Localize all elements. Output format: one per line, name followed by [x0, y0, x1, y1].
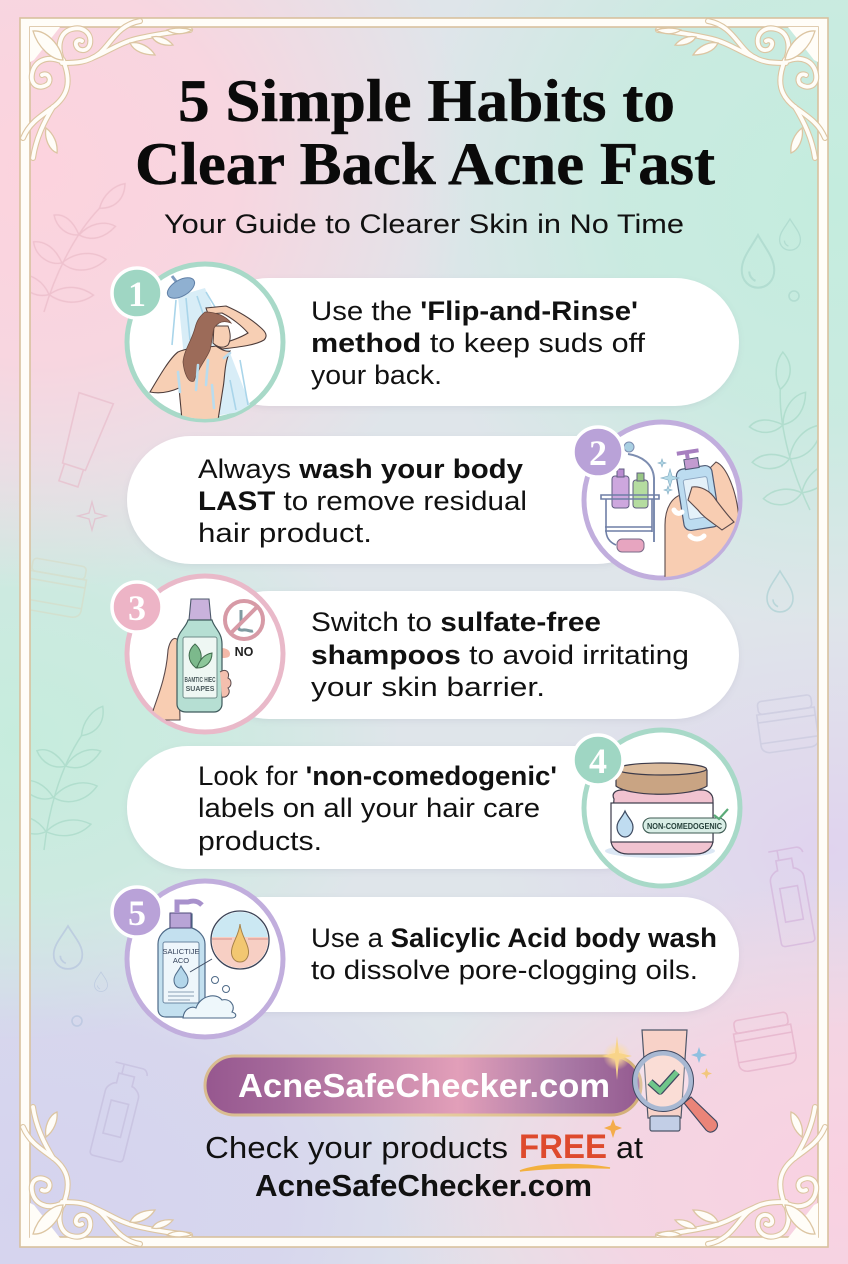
sparkle: [78, 502, 106, 530]
icon: no sulfates sign: [225, 601, 263, 659]
subtitle: Your Guide to Clearer Skin in No Time: [164, 209, 684, 239]
bottle outline right: [768, 846, 816, 948]
panel: habit 1: [112, 264, 739, 420]
text 4: products.: [198, 826, 322, 856]
text 1: method to keep suds off: [311, 328, 646, 358]
text 5: to dissolve pore-clogging oils.: [311, 955, 698, 985]
title: Clear Back Acne Fast: [135, 131, 715, 197]
jar outline bottom right: [731, 1011, 797, 1073]
icon: sulfate-free shampoo bottle: [127, 576, 283, 732]
drops bottom left: [54, 926, 108, 1026]
badge 5: [112, 887, 162, 937]
icon: non-comedogenic jar: [584, 730, 740, 886]
badge 4: [573, 735, 623, 785]
leaf sprig bottom left: [31, 706, 104, 850]
badge 4: 4: [589, 741, 607, 781]
text 1: [311, 296, 646, 390]
text 1: Use the 'Flip-and-Rinse': [311, 296, 638, 326]
icon: sulfate-free shampoo bottle: SUAPES: [186, 686, 215, 693]
panel: habit 4: [127, 730, 740, 886]
call to action button: [205, 1056, 641, 1115]
leaf sprig top left: [31, 183, 126, 312]
badge 3: [112, 582, 162, 632]
badge 5: 5: [128, 893, 146, 933]
text 1: your back.: [311, 360, 442, 390]
bottle outline bottom left: [89, 1061, 149, 1163]
icon: gold star near free: [604, 1119, 622, 1138]
leaf sprig right: [748, 351, 817, 510]
icon: shower head: [164, 274, 198, 302]
icon: woman showering: [127, 264, 283, 420]
call to action button: AcneSafeChecker.com: [238, 1067, 610, 1104]
text 2: [198, 454, 527, 548]
pill 2: [127, 436, 661, 564]
icon: magnifier over product tube: [632, 1030, 717, 1132]
icon: shower caddy and body wash: [584, 422, 740, 590]
badge 2: [573, 427, 623, 477]
text 4: Look for 'non-comedogenic': [198, 761, 557, 791]
icon: non-comedogenic jar: NON-COMEDOGENIC: [647, 821, 722, 831]
footer text: AcneSafeChecker.com: [255, 1168, 592, 1203]
badge 3: 3: [128, 588, 146, 628]
text 2: hair product.: [198, 518, 372, 548]
drop right: [767, 571, 793, 612]
text 2: Always wash your body: [198, 454, 523, 484]
text 3: [311, 607, 689, 702]
badge 1: 1: [128, 274, 146, 314]
jar outline right: [755, 694, 820, 754]
pill 1: [205, 278, 739, 406]
footer text: at: [616, 1130, 643, 1165]
title: 5 Simple Habits to: [178, 68, 675, 134]
water drops top right: [742, 219, 800, 301]
footer text: FREE: [519, 1128, 607, 1166]
panel: habit 5: [112, 881, 739, 1037]
text 4: [198, 761, 557, 856]
icon: salicylic acid wash: SALICTIJE: [162, 947, 200, 956]
tube outline: [51, 393, 113, 489]
badge 2: 2: [589, 433, 607, 473]
icon: no sulfates sign: NO: [235, 645, 254, 659]
icon: salicylic acid wash: ACO: [173, 956, 189, 965]
panel: habit 3: [112, 576, 739, 732]
pill 3: [205, 591, 739, 719]
text 5: Use a Salicylic Acid body wash: [311, 923, 717, 953]
pill 5: [205, 897, 739, 1012]
text 3: Switch to sulfate-free: [311, 607, 601, 637]
footer text: Check your products: [205, 1130, 508, 1165]
text 4: labels on all your hair care: [198, 793, 540, 823]
badge 1: [112, 268, 162, 318]
pill 4: [127, 746, 661, 869]
icon: salicylic acid wash: [127, 881, 283, 1037]
icon: sparkle on button: [602, 1036, 632, 1080]
title: [135, 68, 715, 197]
text 3: shampoos to avoid irritating: [311, 640, 689, 670]
footer text: [205, 1128, 643, 1203]
text 5: [311, 923, 717, 985]
text 2: LAST to remove residual: [198, 486, 527, 516]
panel: habit 2: [127, 422, 740, 590]
jar outline left: [31, 558, 88, 618]
background line decorations: [6, 159, 848, 1163]
text 3: your skin barrier.: [311, 672, 545, 702]
icon: sulfate-free shampoo bottle: BAMTIC HIEC: [184, 677, 216, 684]
icon: pore cross-section: [211, 911, 269, 971]
